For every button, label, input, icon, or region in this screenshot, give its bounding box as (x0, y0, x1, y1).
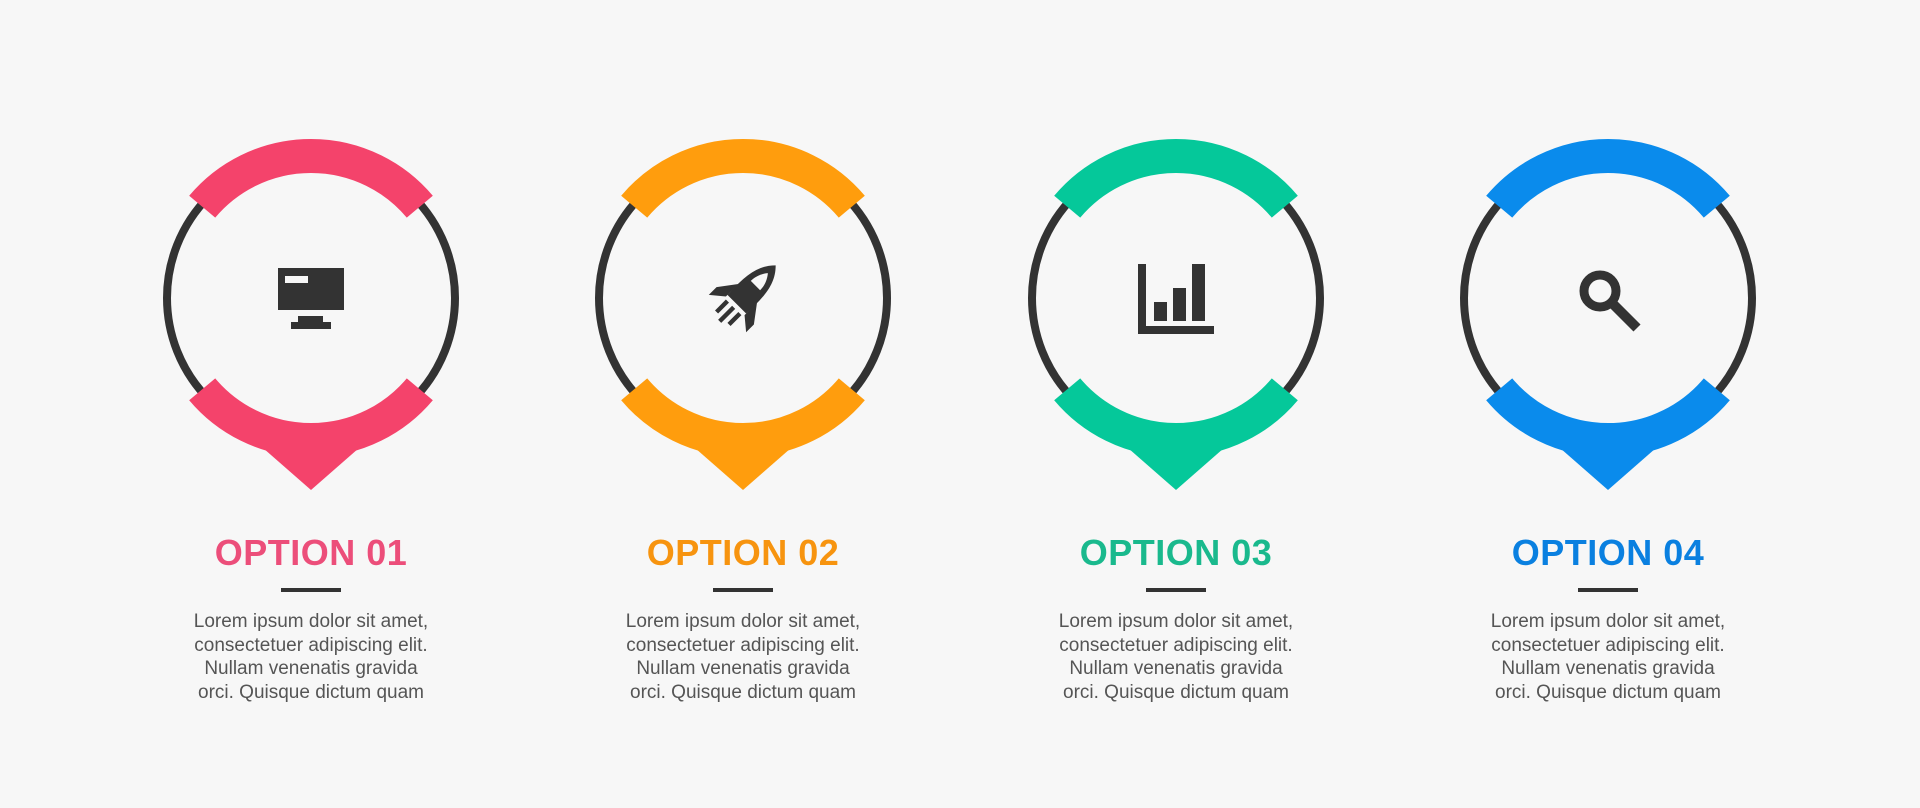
text: option 02: OPTION 02 (647, 532, 839, 573)
marker 3 (1032, 154, 1320, 490)
text: option 01: OPTION 01 (215, 532, 407, 573)
text: option 03: Nullam venenatis gravida (1069, 658, 1283, 679)
text: option 02: Lorem ipsum dolor sit amet, (626, 611, 860, 632)
text: option 04: Lorem ipsum dolor sit amet, (1491, 611, 1725, 632)
text: option 01: Nullam venenatis gravida (204, 658, 418, 679)
icon: rocket (701, 247, 794, 340)
text: option 01: consectetuer adipiscing elit. (194, 634, 428, 656)
text: option 03: orci. Quisque dictum quam (1063, 682, 1289, 702)
marker 2 (599, 154, 887, 490)
icon: monitor (278, 268, 344, 329)
marker 4 (1464, 154, 1752, 490)
marker 1 (167, 154, 455, 490)
text: option 03 (1059, 532, 1293, 702)
icon: bar chart (1138, 264, 1214, 334)
text: option 04: consectetuer adipiscing elit. (1491, 634, 1725, 656)
text: option 03: OPTION 03 (1080, 532, 1272, 573)
text: option 03: consectetuer adipiscing elit. (1059, 634, 1293, 656)
text: option 02: consectetuer adipiscing elit. (626, 634, 860, 656)
text: option 02 (626, 532, 860, 702)
text: option 04 (1491, 532, 1725, 702)
text: option 04: Nullam venenatis gravida (1501, 658, 1715, 679)
icon: magnifier (1584, 275, 1637, 328)
text: option 02: orci. Quisque dictum quam (630, 682, 856, 702)
text: option 02: Nullam venenatis gravida (636, 658, 850, 679)
text: option 03: Lorem ipsum dolor sit amet, (1059, 611, 1293, 632)
text: option 04: OPTION 04 (1512, 532, 1704, 573)
text: option 01: orci. Quisque dictum quam (198, 682, 424, 702)
text: option 01: Lorem ipsum dolor sit amet, (194, 611, 428, 632)
text: option 01 (194, 532, 428, 702)
text: option 04: orci. Quisque dictum quam (1495, 682, 1721, 702)
